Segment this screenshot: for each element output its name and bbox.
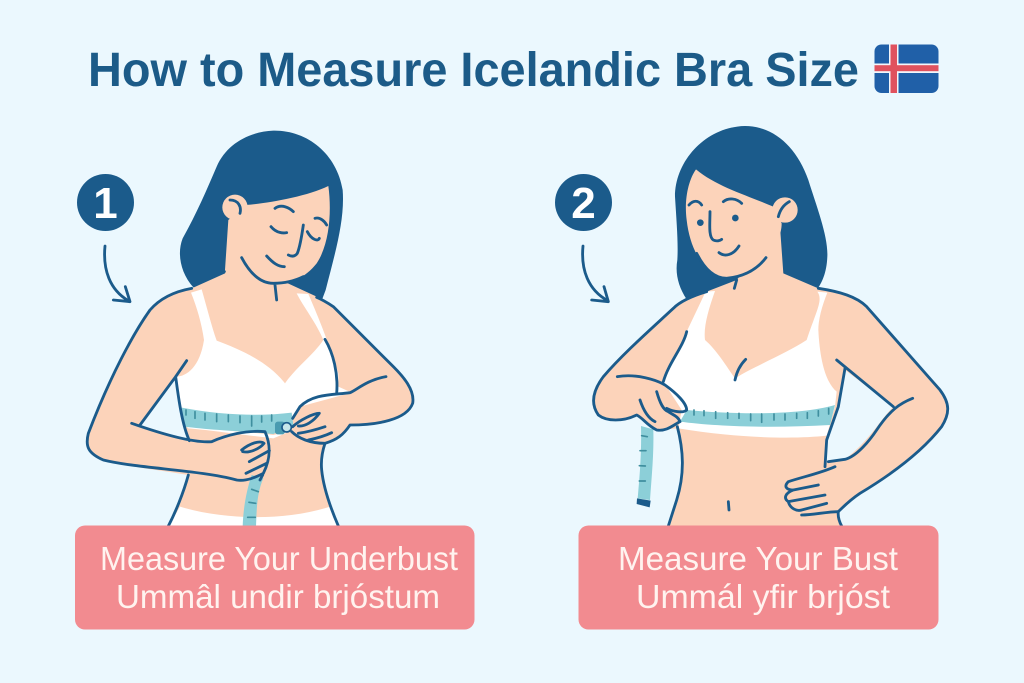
measuring tape <box>182 408 293 434</box>
arrow: step 2 <box>583 246 608 302</box>
under-band <box>185 425 293 438</box>
tape ticks <box>186 410 272 426</box>
icon: Icelandic flag <box>874 44 938 93</box>
caption panel: underbust <box>75 526 474 630</box>
figure 2: measuring bust <box>594 126 948 527</box>
panties <box>168 507 338 527</box>
step 2 badge: 2 <box>571 179 596 228</box>
step 1 badge: 1 <box>93 179 118 228</box>
gap between arm and torso <box>140 377 188 440</box>
tape buckle <box>275 422 291 434</box>
face <box>225 186 330 284</box>
body skin <box>87 270 413 527</box>
ear <box>772 197 798 223</box>
caption panel: underbust: Measure Your Underbust <box>100 540 458 577</box>
caption panel: underbust: Ummâl undir brjóstum <box>116 578 440 615</box>
body outline <box>594 288 948 526</box>
caption panel: bust: Ummál yfir brjóst <box>636 578 890 615</box>
hands detail <box>242 413 332 473</box>
hair <box>675 126 827 299</box>
eyes <box>697 215 739 226</box>
ear <box>222 195 248 220</box>
hair <box>180 131 343 301</box>
chest and navel <box>728 359 746 510</box>
hanging tape <box>243 475 263 527</box>
title: How to Measure Icelandic Bra Size <box>88 44 859 97</box>
face lines <box>230 200 327 300</box>
arrow: step 1 <box>105 246 130 302</box>
figure 1: measuring underbust <box>87 131 413 527</box>
hand on hip detail <box>786 467 838 515</box>
caption panel: bust <box>578 526 938 630</box>
body outline <box>87 288 413 526</box>
caption panel: bust: Measure Your Bust <box>618 540 898 577</box>
bra <box>176 289 352 420</box>
body skin <box>594 227 948 527</box>
bra <box>663 291 837 438</box>
tape ticks <box>694 408 829 422</box>
face lines <box>689 199 789 288</box>
tape end <box>637 498 651 507</box>
step 1 badge <box>77 174 134 231</box>
hanging tape <box>637 426 653 507</box>
gap between arm and torso <box>827 370 893 462</box>
face <box>686 169 782 279</box>
measuring tape <box>680 405 835 427</box>
step 2 badge <box>555 174 612 231</box>
